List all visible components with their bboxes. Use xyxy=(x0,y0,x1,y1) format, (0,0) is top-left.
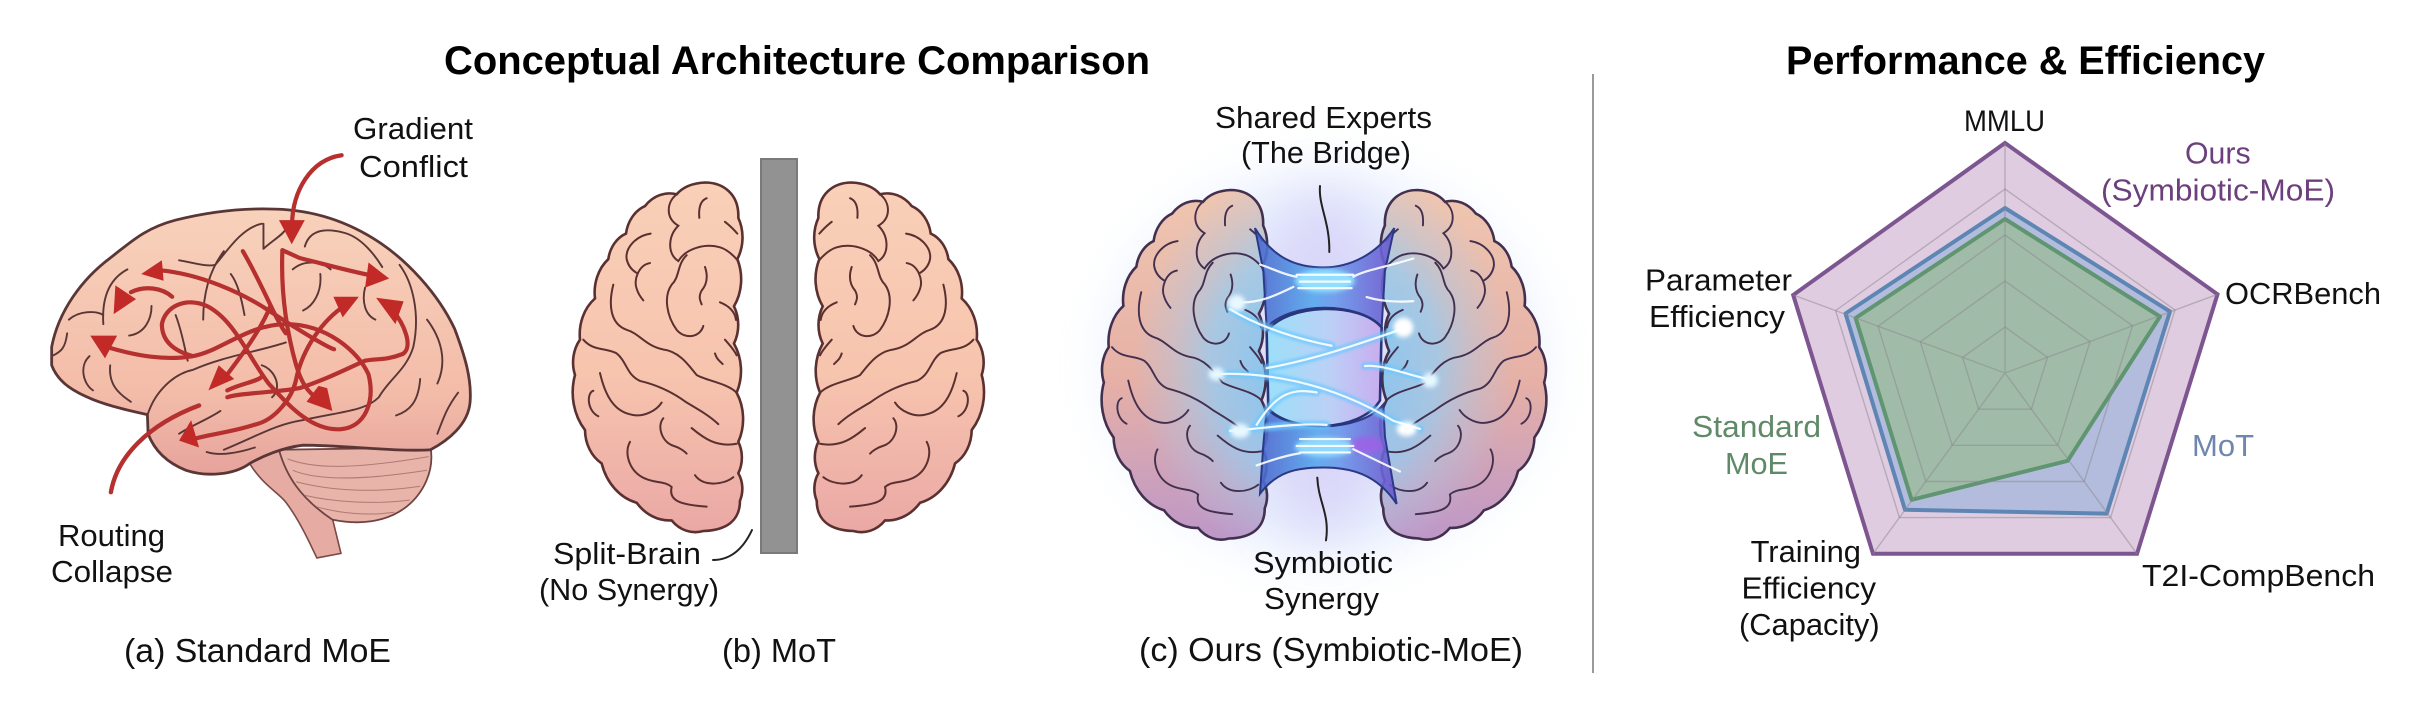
label: Shared Experts (The Bridge): Shared Experts xyxy=(1215,100,1432,135)
title: Performance & Efficiency: Performance & Efficiency xyxy=(1786,39,2266,83)
panel: Symbiotic-MoE brain xyxy=(1102,159,1546,569)
axis label: Parameter Efficiency xyxy=(1645,262,1792,334)
label: Gradient Conflict xyxy=(353,111,473,184)
radar chart xyxy=(1793,143,2218,554)
label: Split-Brain (No Synergy): Split-Brain xyxy=(553,536,701,571)
brain folds xyxy=(52,224,458,454)
leader line: symbiotic synergy xyxy=(1317,478,1327,540)
axis label: MMLU: MMLU xyxy=(1964,105,2045,138)
conflicting red routing arrows xyxy=(90,250,408,447)
axis label: Training Efficiency (Capacity): Training xyxy=(1751,534,1861,569)
label: Shared Experts (The Bridge) xyxy=(1215,100,1432,170)
axis label: Training Efficiency (Capacity): Efficiency xyxy=(1742,571,1876,606)
panel: MoT left hemisphere xyxy=(573,183,743,532)
legend label: Ours (Symbiotic-MoE): (Symbiotic-MoE) xyxy=(2101,172,2335,208)
label: Gradient Conflict: Conflict xyxy=(359,149,468,184)
legend label: Standard MoE xyxy=(1692,409,1821,481)
series: Standard MoE xyxy=(1856,219,2160,500)
arrow: routing collapse xyxy=(111,405,199,492)
axis label: T2I-CompBench: T2I-CompBench xyxy=(2142,558,2375,593)
label: Routing Collapse: Collapse xyxy=(51,554,173,589)
series: MoT xyxy=(1846,208,2170,514)
leader line: split-brain xyxy=(713,530,752,560)
axis label: Training Efficiency (Capacity): (Capacity) xyxy=(1739,607,1880,642)
cerebellum xyxy=(279,447,431,522)
right hemisphere lines xyxy=(1380,190,1546,540)
arrow: gradient conflict xyxy=(279,155,342,244)
legend label: Standard MoE: MoE xyxy=(1725,446,1788,481)
legend label: MoT: MoT xyxy=(2192,428,2254,463)
left hemisphere lines xyxy=(1102,190,1268,540)
panel: Standard MoE brain xyxy=(52,155,470,558)
label: Routing Collapse: Routing xyxy=(58,518,165,553)
divider xyxy=(1592,74,1594,673)
label: Gradient Conflict: Gradient xyxy=(353,111,473,146)
label: Symbiotic Synergy: Symbiotic xyxy=(1253,545,1393,580)
series: Ours (Symbiotic-MoE) xyxy=(1793,143,2218,554)
axis label: Parameter Efficiency: Efficiency xyxy=(1649,299,1786,334)
label: Symbiotic Synergy xyxy=(1253,545,1393,616)
caption: (a) Standard MoE: (a) Standard MoE xyxy=(124,632,391,669)
brainstem xyxy=(250,450,341,558)
label: Routing Collapse xyxy=(51,518,173,589)
label: Shared Experts (The Bridge): (The Bridge) xyxy=(1241,135,1411,170)
bridge and energy streaks xyxy=(1209,228,1438,504)
axis label: Parameter Efficiency: Parameter xyxy=(1645,262,1792,298)
legend label: Standard MoE: Standard xyxy=(1692,409,1821,444)
radar grid xyxy=(1793,143,2218,554)
legend label: Ours (Symbiotic-MoE) xyxy=(2101,135,2335,208)
label: Symbiotic Synergy: Synergy xyxy=(1264,581,1379,616)
label: Split-Brain (No Synergy): (No Synergy) xyxy=(539,572,719,607)
axis label: OCRBench: OCRBench xyxy=(2225,276,2381,311)
legend label: Ours (Symbiotic-MoE): Ours xyxy=(2185,135,2251,170)
blue glow over inner lobes xyxy=(1146,193,1503,532)
gray wall between hemispheres xyxy=(761,159,797,553)
background glow xyxy=(1109,175,1539,555)
leader line: shared experts xyxy=(1320,186,1329,252)
caption: (b) MoT: (b) MoT xyxy=(722,632,836,669)
title: Conceptual Architecture Comparison: Conceptual Architecture Comparison xyxy=(444,39,1150,83)
left hemisphere fill xyxy=(1102,190,1268,540)
right hemisphere fill xyxy=(1380,190,1546,540)
caption: (c) Ours (Symbiotic-MoE): (c) Ours (Symbiotic-MoE) xyxy=(1139,631,1523,668)
cerebrum outline xyxy=(52,209,470,474)
axis label: Training Efficiency (Capacity) xyxy=(1739,534,1880,642)
panel: MoT right hemisphere xyxy=(814,183,984,532)
label: Split-Brain (No Synergy) xyxy=(539,536,719,607)
